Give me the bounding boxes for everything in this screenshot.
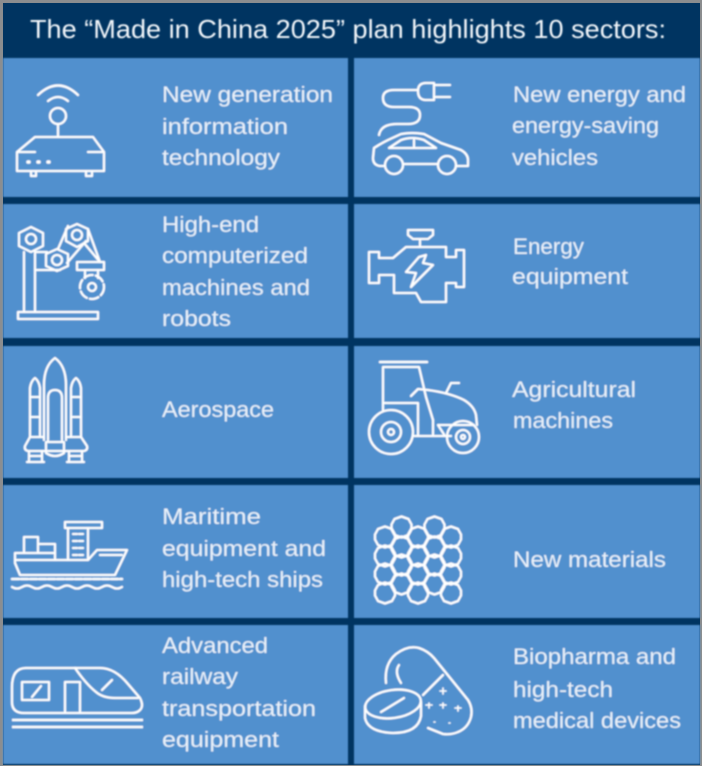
label: Aerospace [162, 397, 274, 422]
label: Agricultural [512, 377, 636, 402]
label: robots [162, 306, 231, 331]
icon: tractor [369, 362, 479, 454]
panel: new energy and energy-saving vehicles [354, 58, 700, 197]
label [162, 212, 310, 331]
panel: aerospace [3, 346, 348, 478]
label: equipment and [162, 536, 326, 561]
label [512, 234, 628, 289]
panel: maritime equipment and high-tech ships [3, 485, 348, 618]
label: Advanced [162, 633, 268, 658]
label: transportation [162, 696, 316, 721]
label: New materials [513, 547, 666, 572]
icon: cargo ship [12, 522, 127, 588]
label [162, 504, 326, 592]
panel: biopharma and high-tech medical devices [354, 625, 700, 764]
panel: advanced railway transportation equipment [3, 625, 348, 764]
icon: space shuttle [25, 358, 87, 462]
label: machines and [162, 275, 310, 300]
panel: new generation information technology [3, 58, 348, 197]
label: High-end [162, 212, 259, 237]
label: New generation [162, 82, 333, 107]
label [513, 644, 681, 733]
icon: robot arm [18, 224, 104, 319]
label [162, 82, 333, 170]
panel: new materials [354, 485, 700, 618]
icon: electric car with plug [373, 83, 468, 174]
label: New energy and [513, 82, 686, 107]
label: machines [513, 408, 613, 433]
icon: high-speed train [12, 668, 143, 727]
icon: honeycomb lattice [375, 516, 461, 604]
label: information [162, 114, 288, 139]
label: technology [162, 145, 280, 170]
label: Energy [513, 234, 584, 259]
label [162, 633, 316, 752]
label: equipment [162, 727, 279, 752]
label: energy-saving [512, 113, 659, 138]
label: vehicles [512, 145, 598, 170]
panel: agricultural machines [354, 346, 700, 478]
icon: capsule and tablet [363, 647, 472, 734]
icon: wifi router [17, 86, 104, 176]
title: The “Made in China 2025” plan highlights 10 sectors: [30, 14, 666, 44]
label: computerized [162, 243, 308, 268]
panel: high-end computerized machines and robots [3, 204, 348, 338]
panel: energy equipment [354, 204, 700, 338]
icon: engine with lightning bolt [369, 230, 464, 302]
label [512, 82, 686, 170]
label: equipment [512, 264, 628, 289]
label: Biopharma and [513, 644, 676, 669]
label: railway [162, 664, 238, 689]
label: high-tech ships [162, 567, 323, 592]
label: Maritime [162, 504, 261, 529]
label: medical devices [513, 708, 681, 733]
label [512, 377, 636, 433]
label: high-tech [513, 677, 613, 702]
